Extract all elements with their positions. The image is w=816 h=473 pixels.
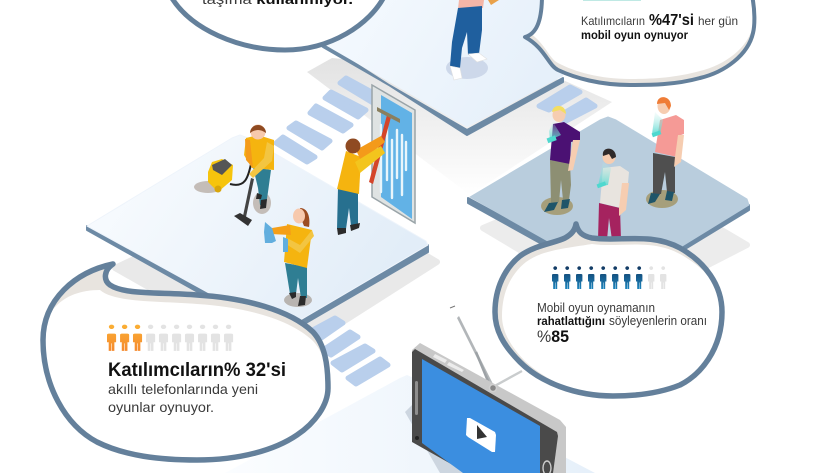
callout: right bubble <box>495 224 726 396</box>
steps: lower staircase <box>309 318 388 384</box>
illustration: person with purple shirt on phone <box>541 106 580 215</box>
illustration: person with vacuum cleaner <box>194 124 274 226</box>
text: new games statistic <box>108 360 286 415</box>
text: daily mobile gaming statistic <box>581 12 738 42</box>
panel: right platform <box>468 117 749 288</box>
icon: window with squeegee <box>369 85 415 223</box>
panel: left platform <box>87 135 428 338</box>
text: relaxation statistic: Mobil oyun oynamanın <box>537 301 655 315</box>
pictogram: 3 of 10 people orange <box>107 325 233 351</box>
text: relaxation statistic: söyleyenlerin oranı <box>609 314 707 328</box>
illustration: woman with spray bottle <box>264 208 314 307</box>
illustration: person with white shirt on phone <box>597 149 629 240</box>
ground shadow: under left platform <box>115 180 437 362</box>
callout: top left bubble <box>170 0 385 50</box>
text: daily mobile gaming statistic: Katılımcıların <box>581 14 645 28</box>
text: relaxation statistic <box>537 301 707 346</box>
text: relaxation statistic: rahatlattığını <box>537 314 605 328</box>
pictogram: 8 of 10 people blue <box>552 266 666 289</box>
text: relaxation statistic: %85 <box>537 327 569 346</box>
text: new games statistic: akıllı telefonlarında yeni <box>108 381 258 397</box>
ground shadow: under right platform <box>483 170 747 310</box>
text: daily mobile gaming statistic: %47'si <box>649 12 694 29</box>
illustration: person with pink shirt on phone <box>646 97 684 208</box>
steps: upper left staircase <box>276 78 381 162</box>
text: daily mobile gaming statistic: her gün <box>698 14 738 28</box>
illustration: standing person in jeans <box>446 0 499 80</box>
icon: play button <box>466 418 496 452</box>
text: new games statistic: oyunlar oynuyor. <box>108 399 214 415</box>
panel: top platform <box>300 0 563 135</box>
callout: left bubble <box>43 264 328 460</box>
ground shadow: under top platform <box>307 58 612 195</box>
icon: smartphone with antenna <box>405 306 566 473</box>
illustration: person cleaning window <box>337 136 385 235</box>
panel: bottom platform <box>225 375 595 473</box>
text: daily mobile gaming statistic: mobil oyun oynuyor <box>581 30 689 42</box>
steps: upper right staircase <box>539 87 595 121</box>
text: new games statistic: Katılımcıların% 32'si <box>108 360 286 381</box>
callout: top right bubble <box>525 0 754 85</box>
